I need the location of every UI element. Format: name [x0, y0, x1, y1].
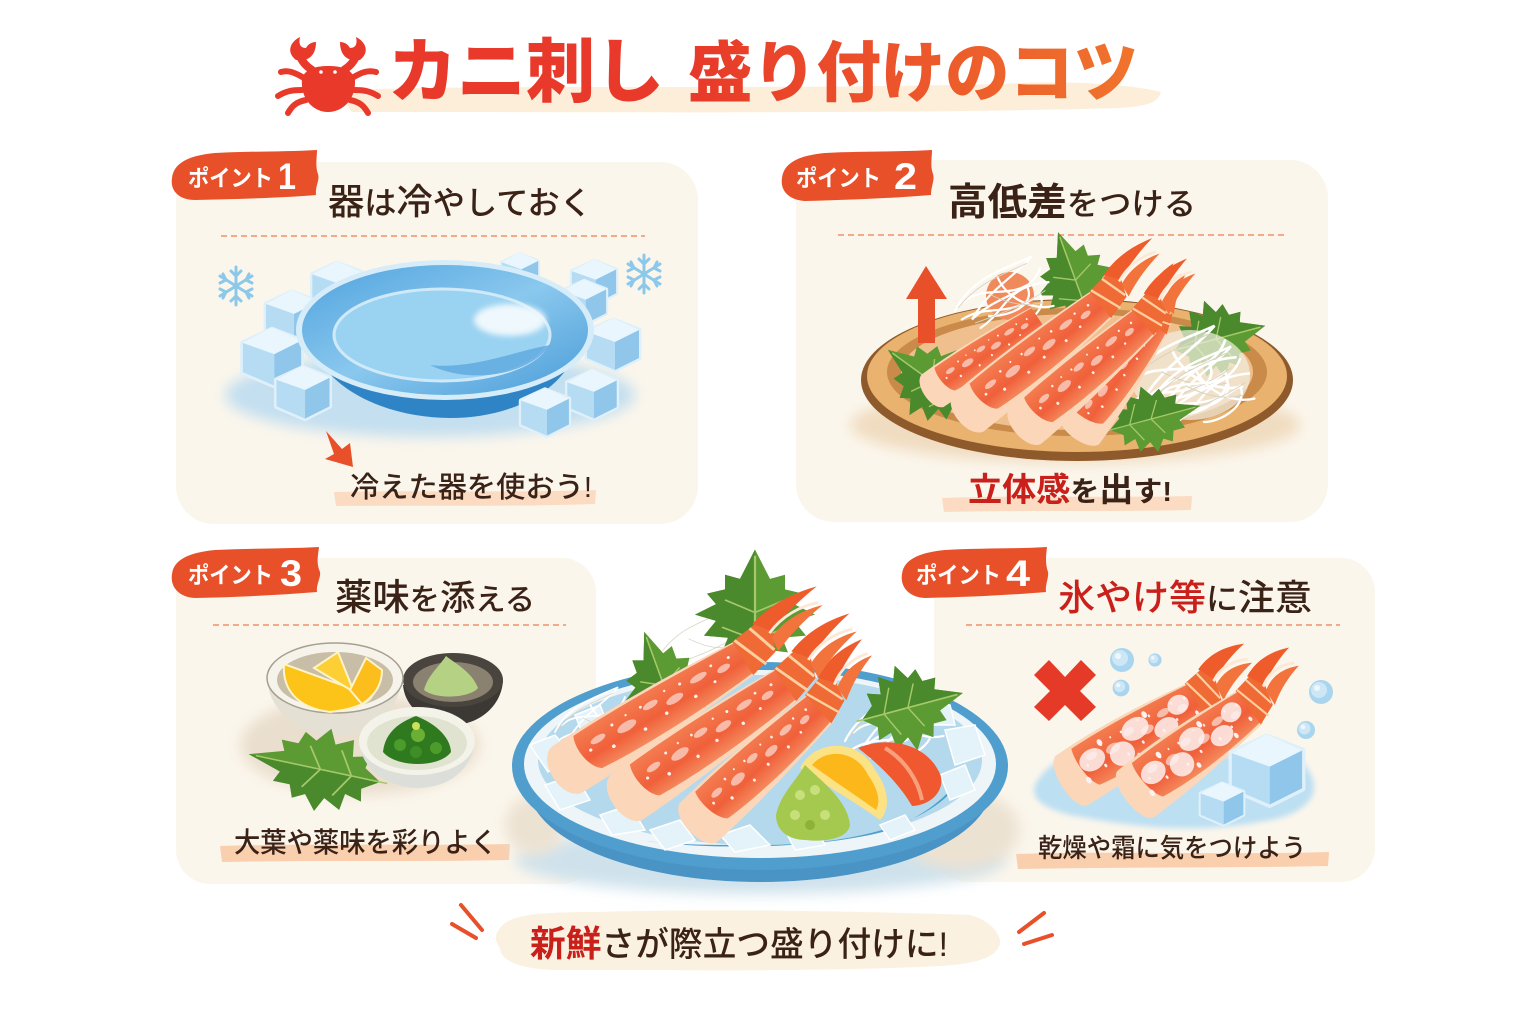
illustration: centre crab sashimi plate [505, 550, 1020, 894]
icon: snowflake right [628, 255, 660, 293]
crab legs [538, 581, 844, 801]
badge: point 2: ポイント [796, 165, 881, 191]
dark bowl with wasabi [403, 653, 503, 725]
badge: point 3 [172, 547, 320, 598]
shiso leaves [695, 550, 815, 671]
crushed ice [530, 700, 985, 852]
badge: point 1 [172, 150, 318, 200]
arrow: up [906, 266, 947, 343]
closing banner: 新鮮さが際立つ盛り付けに! [530, 923, 948, 964]
caption: 冷えた器を使おう! [350, 471, 592, 504]
badge: point 4: 4 [1006, 553, 1030, 594]
illustration: crab legs on wooden plate [850, 218, 1300, 464]
badge: point 2 [782, 150, 934, 201]
accent marks left [452, 905, 482, 938]
white bowl with lemon [267, 643, 403, 736]
caption: 大葉や薬味を彩りよく [234, 827, 497, 858]
panel: point 3 [172, 547, 596, 884]
badge: point 1: ポイント [188, 165, 273, 191]
white bowl with green herbs [359, 707, 475, 788]
heading: 薬味を添える [335, 577, 535, 618]
title text: 盛り付けのコツ: 盛り付けのコツ [688, 36, 1138, 110]
badge: point 4: ポイント [916, 562, 1001, 588]
arrow [325, 431, 353, 467]
icon: snowflake left [220, 267, 252, 305]
lemon wedge [800, 746, 887, 820]
caption: 乾燥や霜に気をつけよう [1038, 833, 1306, 863]
panel background [796, 160, 1328, 522]
heading: 器は冷やしておく [328, 181, 592, 222]
caption: 立体感を出す! [968, 471, 1172, 508]
title highlight band [344, 82, 1161, 112]
water droplets [1110, 648, 1333, 739]
illustration: chilled blue plate with ice [225, 253, 639, 437]
panel: point 1 [172, 150, 698, 524]
heading: 高低差をつける [948, 182, 1196, 224]
panel background [176, 558, 596, 884]
banner background [496, 910, 1000, 970]
badge: point 3: ポイント [188, 562, 273, 588]
accent marks right [1019, 913, 1052, 944]
title [278, 33, 1161, 113]
badge: point 4 [902, 547, 1048, 598]
badge: point 2: 2 [894, 156, 917, 197]
panel: point 4 [902, 547, 1375, 882]
icon: cross mark [1034, 660, 1096, 721]
illustration: condiment bowls [240, 643, 503, 825]
panel background [934, 558, 1375, 882]
wasabi mound [776, 765, 850, 841]
badge: point 1: 1 [278, 156, 296, 197]
closing banner [496, 910, 1000, 970]
panel: point 2 [782, 150, 1328, 522]
tomato slices [858, 742, 941, 806]
badge: point 3: 3 [280, 553, 302, 594]
illustration: frosted crab legs on ice [1034, 638, 1322, 828]
heading: 氷やけ等に注意 [1058, 577, 1312, 618]
icon: crab [278, 37, 378, 113]
panel background [176, 162, 698, 524]
title text: カニ刺し: カニ刺し [388, 33, 664, 111]
icon: shiso leaf [240, 713, 396, 825]
